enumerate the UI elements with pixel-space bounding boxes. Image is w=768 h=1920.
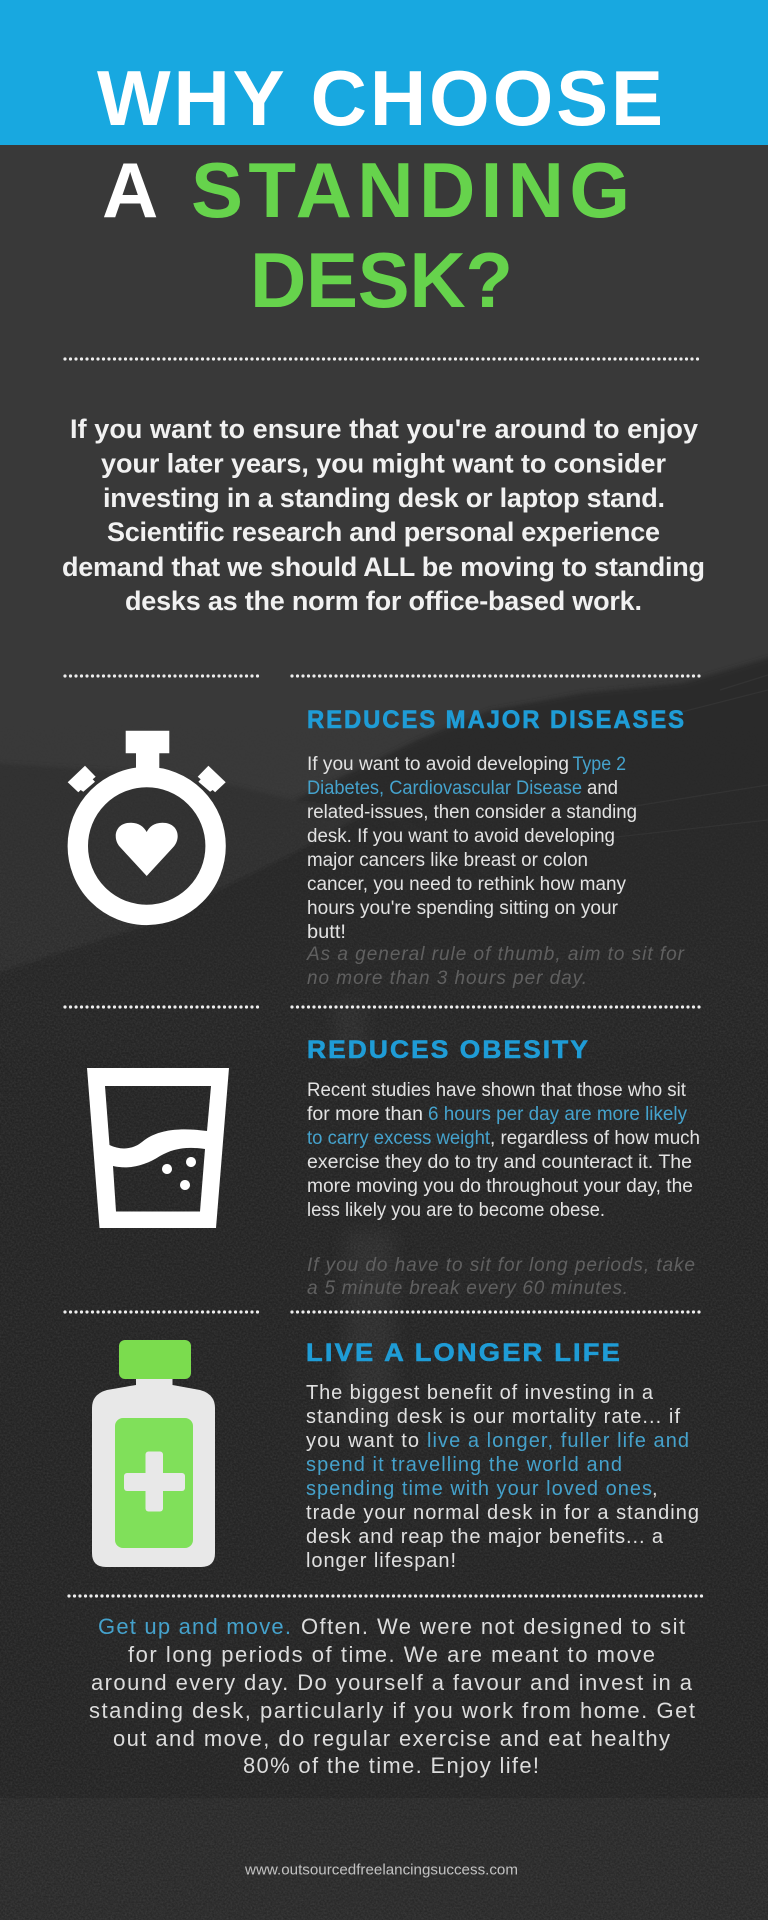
body text: longer life: The biggest benefit of investing in a (306, 1382, 654, 1404)
title: DESK? (250, 236, 513, 324)
body text: diseases: cancer, you need to rethink how many (307, 874, 626, 895)
note: sitting rule of thumb: no more than 3 hours per day. (307, 968, 587, 989)
icon: glass of water (87, 1068, 229, 1228)
heading: reduces obesity: REDUCES OBESITY (307, 1036, 590, 1064)
intro paragraph: your later years, you might want to consider (101, 448, 666, 478)
intro paragraph: desks as the norm for office-based work. (125, 586, 642, 616)
body text: diseases: desk. If you want to avoid developing (307, 826, 615, 847)
header band (0, 0, 768, 145)
body text: longer life: trade your normal desk in for a standing (306, 1502, 699, 1524)
body text: obesity: more moving you do throughout your day, the (307, 1176, 693, 1197)
body text: obesity: to carry excess weight (307, 1128, 491, 1149)
body text: obesity: Recent studies have shown that those who sit (307, 1080, 687, 1101)
closing paragraph: around every day. Do yourself a favour and invest in a (91, 1670, 693, 1695)
intro paragraph: demand that we should ALL be moving to standing (62, 552, 705, 582)
body text: longer life: live a longer, fuller life and (427, 1430, 689, 1452)
body text: diseases (307, 754, 637, 943)
body text: longer life: standing desk is our mortality rate... if (306, 1406, 680, 1428)
body text: obesity (307, 1080, 700, 1221)
body text: longer life (306, 1382, 699, 1572)
body text: diseases: Type 2 (572, 754, 626, 775)
body text: diseases: major cancers like breast or colon (307, 850, 588, 871)
note: sitting rule of thumb (306, 944, 685, 989)
body text: diseases: butt! (307, 922, 346, 943)
body text: longer life: you want to (306, 1430, 419, 1452)
closing paragraph: Often. We were not designed to sit (301, 1614, 685, 1639)
intro paragraph (62, 414, 705, 616)
note: take a break: a 5 minute break every 60 minutes. (307, 1278, 628, 1299)
body text: obesity: for more than (307, 1104, 423, 1125)
body text: longer life: , (652, 1478, 658, 1500)
note: sitting rule of thumb: As a general rule of thumb, aim to sit for (306, 944, 685, 965)
title: WHY CHOOSE (97, 54, 663, 142)
closing paragraph (89, 1614, 695, 1778)
body text: longer life: spending time with your loved ones (306, 1478, 652, 1500)
note: take a break (307, 1255, 695, 1299)
website footer: www.outsourcedfreelancingsuccess.com (244, 1862, 518, 1878)
intro paragraph: If you want to ensure that you're around to enjoy (70, 414, 698, 444)
body text: longer life: desk and reap the major benefits... a (306, 1526, 664, 1548)
body text: obesity: less likely you are to become obese. (307, 1200, 605, 1221)
body text: longer life: longer lifespan! (306, 1550, 456, 1572)
title: A (102, 146, 158, 234)
body text: longer life: spend it travelling the world and (306, 1454, 622, 1476)
body text: obesity: , regardless of how much (490, 1128, 700, 1149)
title (97, 54, 663, 324)
heading: reduces major diseases: REDUCES MAJOR DISEASES (307, 706, 686, 734)
section: live a longer life (306, 1339, 699, 1572)
closing paragraph: 80% of the time. Enjoy life! (243, 1753, 539, 1778)
closing paragraph: Get up and move. (98, 1614, 291, 1639)
body text: diseases: and (587, 778, 618, 799)
body text: diseases: If you want to avoid developing (307, 754, 569, 775)
body text: obesity: exercise they do to try and counteract it. The (307, 1152, 692, 1173)
closing paragraph: standing desk, particularly if you work from home. Get (89, 1698, 695, 1723)
closing paragraph: out and move, do regular exercise and eat healthy (113, 1726, 670, 1751)
section: reduces obesity (307, 1036, 700, 1299)
body text: diseases: hours you're spending sitting on your (307, 898, 619, 919)
body text: diseases: related-issues, then consider a standing (307, 802, 637, 823)
icon: medicine bottle (92, 1340, 215, 1567)
body text: obesity: 6 hours per day are more likely (428, 1104, 687, 1125)
title: STANDING (191, 146, 630, 234)
closing paragraph: for long periods of time. We are meant to move (128, 1642, 655, 1667)
intro paragraph: Scientific research and personal experience (107, 517, 660, 547)
intro paragraph: investing in a standing desk or laptop stand. (103, 483, 665, 513)
note: take a break: If you do have to sit for long periods, take (307, 1255, 695, 1276)
icon: stopwatch with heart (68, 731, 226, 915)
body text: diseases: Diabetes, Cardiovascular Disease (307, 778, 582, 799)
heading: live a longer life: LIVE A LONGER LIFE (306, 1339, 622, 1367)
section: reduces major diseases (306, 706, 686, 989)
